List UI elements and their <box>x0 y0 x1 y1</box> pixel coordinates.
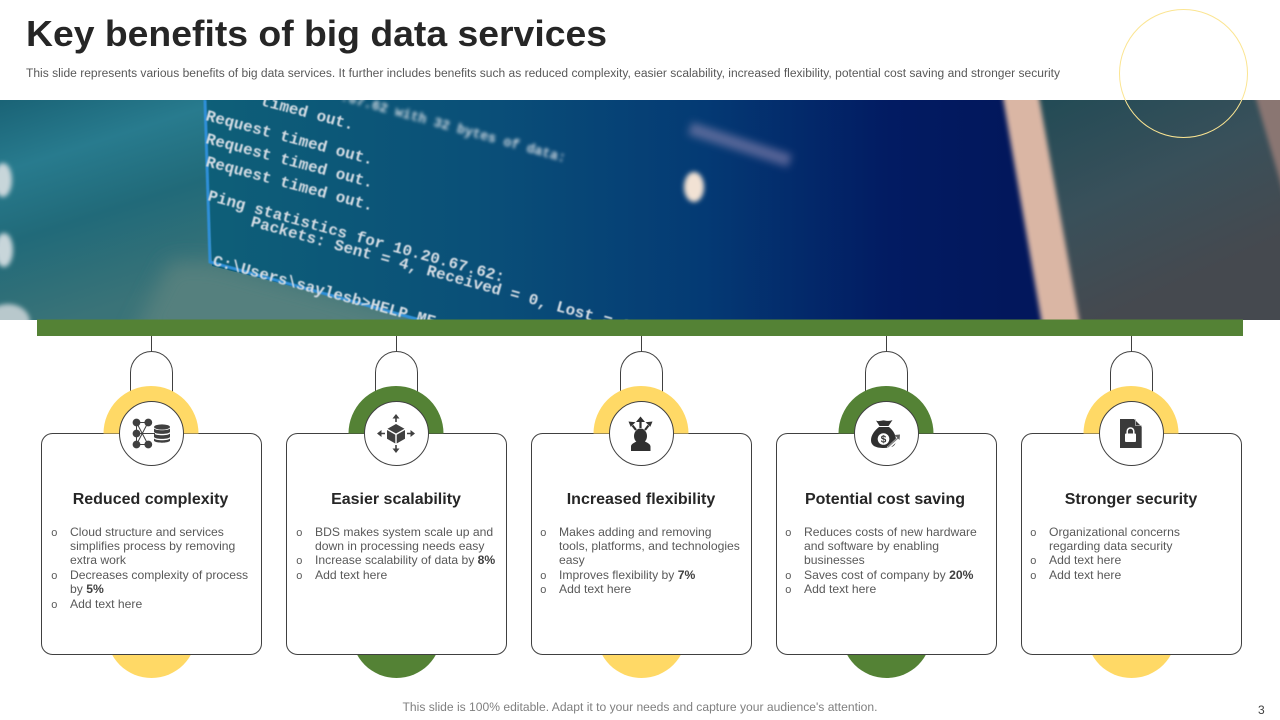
bullet list: easier scalability: down in processing needs easy <box>315 539 485 553</box>
bullet list: increased flexibility: Improves flexibility by 7% <box>559 568 696 582</box>
title: Key benefits of big data services <box>26 13 607 54</box>
photo: computer screen with terminal text: C:\Users\saylesb>HELP ME. <box>211 252 447 334</box>
bullet list: reduced complexity: extra work <box>70 553 127 567</box>
bullet list: potential cost saving: o <box>785 528 792 540</box>
bullet list: stronger security: Add text here <box>1049 568 1121 582</box>
bullet list: reduced complexity <box>51 525 248 612</box>
bullet list: increased flexibility: easy <box>559 553 586 567</box>
photo: computer screen with terminal text: .67.62 with 32 bytes of data: <box>339 90 567 167</box>
photo: computer screen with terminal text: Packets: Sent = 4, Received = 0, Lost = 0 <box>249 213 633 336</box>
heading: easier scalability: Easier scalability <box>331 491 461 508</box>
bullet list: increased flexibility: o <box>540 528 547 540</box>
bullet list: reduced complexity: o <box>51 571 58 583</box>
bullet list: stronger security: regarding data security <box>1049 539 1173 553</box>
photo: computer screen with terminal text: Ping statistics for 10.20.67.62: <box>206 187 507 287</box>
bullet list: easier scalability: o <box>296 528 303 540</box>
photo: computer screen with terminal text: timed out. <box>259 92 356 135</box>
decorative ring <box>1120 10 1248 138</box>
bullet list: stronger security: o <box>1030 528 1037 540</box>
heading: increased flexibility: Increased flexibility <box>567 491 715 508</box>
photo: computer screen with terminal text: Request timed out. <box>204 130 375 193</box>
heading: reduced complexity: Reduced complexity <box>73 491 228 508</box>
bullet list: stronger security <box>1030 525 1180 583</box>
bullet list: easier scalability <box>296 525 495 583</box>
panel: increased flexibility <box>532 336 752 678</box>
bullet list: potential cost saving: Reduces costs of new hardware <box>804 525 977 539</box>
bullet list: stronger security: o <box>1030 571 1037 583</box>
page number: 3 <box>1258 703 1265 717</box>
panel: potential cost saving <box>776 336 996 678</box>
bullet list: stronger security: Organizational concerns <box>1049 525 1180 539</box>
bullet list: reduced complexity: o <box>51 600 58 612</box>
bullet list: potential cost saving: businesses <box>804 553 865 567</box>
bullet list: potential cost saving <box>785 525 977 597</box>
bullet list: increased flexibility: o <box>540 585 547 597</box>
bullet list: increased flexibility: Add text here <box>559 582 631 596</box>
bullet list: increased flexibility: tools, platforms, and technologies <box>559 539 740 553</box>
icon: money bag: $ <box>881 434 887 446</box>
bullet list: stronger security: o <box>1030 556 1037 568</box>
bullet list: reduced complexity: simplifies process by removing <box>70 539 235 553</box>
bullet list: easier scalability: Add text here <box>315 568 387 582</box>
bullet list: easier scalability: o <box>296 556 303 568</box>
photo: computer screen with terminal text: Request timed out. <box>204 153 375 216</box>
bullet list: easier scalability: Increase scalability of data by 8% <box>315 553 495 567</box>
bullet list: reduced complexity: Decreases complexity of process <box>70 568 248 582</box>
bullet list: potential cost saving: Saves cost of company by 20% <box>804 568 974 582</box>
bullet list: reduced complexity: Add text here <box>70 597 142 611</box>
bullet list: potential cost saving: and software by enabling <box>804 539 939 553</box>
bullet list: increased flexibility: Makes adding and removing <box>559 525 712 539</box>
bullet list: potential cost saving: o <box>785 571 792 583</box>
bullet list: potential cost saving: Add text here <box>804 582 876 596</box>
bullet list: reduced complexity: by 5% <box>70 582 104 596</box>
subtitle: This slide represents various benefits of big data services. It further includes benefits such as reduced complexity, easier scalability, increased flexibility, potential cost saving and stronger security <box>26 68 1060 80</box>
bullet list: potential cost saving: o <box>785 585 792 597</box>
bullet list: easier scalability: BDS makes system scale up and <box>315 525 493 539</box>
icon: cube with four arrows <box>377 414 415 453</box>
photo: computer screen with terminal text <box>0 90 1280 336</box>
panel: stronger security <box>1022 336 1242 678</box>
heading: potential cost saving: Potential cost saving <box>805 491 965 508</box>
bullet list: reduced complexity: Cloud structure and services <box>70 525 224 539</box>
panel: reduced complexity <box>42 336 262 678</box>
heading: stronger security: Stronger security <box>1065 491 1197 508</box>
bullet list: increased flexibility: o <box>540 571 547 583</box>
panel: easier scalability <box>286 336 506 678</box>
bullet list: easier scalability: o <box>296 571 303 583</box>
bullet list: reduced complexity: o <box>51 528 58 540</box>
icon: locked document <box>1120 419 1142 448</box>
icon: money bag <box>871 420 901 448</box>
bullet list: stronger security: Add text here <box>1049 553 1121 567</box>
photo: computer screen with terminal text: Request timed out. <box>204 107 375 170</box>
icon: person with arrows <box>628 416 652 451</box>
footer note: This slide is 100% editable. Adapt it to your needs and capture your audience's attention. <box>403 700 877 714</box>
green bar <box>37 320 1243 336</box>
icon: network and database <box>133 419 170 448</box>
bullet list: increased flexibility <box>540 525 740 597</box>
